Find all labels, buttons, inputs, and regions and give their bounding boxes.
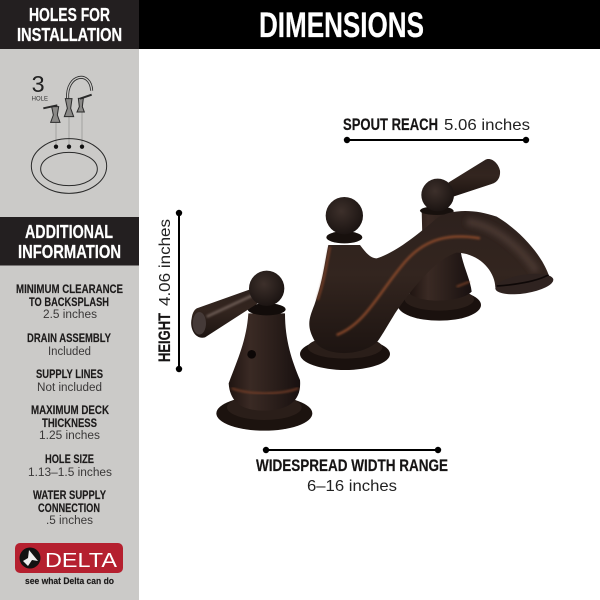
dimension: spout reach: 5.06 inches <box>444 117 530 134</box>
left sidebar panel <box>0 0 139 600</box>
spec: minimum clearance: 2.5 inches <box>43 309 97 321</box>
spec: maximum deck thickness: MAXIMUM DECK <box>31 403 109 417</box>
dimension: spout reach <box>343 115 530 143</box>
spec: water supply connection: CONNECTION <box>38 501 100 515</box>
heading: additional information: INFORMATION <box>18 241 121 262</box>
dimension: height: 4.06 inches <box>157 219 174 306</box>
dimension: height <box>155 210 182 372</box>
dimension: widespread width range: WIDESPREAD WIDTH RANGE <box>256 456 448 475</box>
spec: maximum deck thickness <box>31 403 109 442</box>
logo: Delta: see what Delta can do <box>25 576 114 586</box>
spec: supply lines: SUPPLY LINES <box>36 367 103 381</box>
dimension: widespread width range <box>256 447 448 495</box>
spec: minimum clearance <box>16 282 123 321</box>
spec: drain assembly: Included <box>48 346 91 358</box>
icon: three hole faucet and basin: 3 <box>32 71 45 97</box>
faucet: back handle <box>398 159 500 321</box>
spec: minimum clearance: TO BACKSPLASH <box>29 295 109 309</box>
dimension: widespread width range: 6–16 inches <box>307 478 397 495</box>
logo: Delta: DELTA <box>45 549 117 572</box>
spec: drain assembly: DRAIN ASSEMBLY <box>27 331 111 345</box>
dimension: height: HEIGHT <box>155 313 174 362</box>
dimension: spout reach: SPOUT REACH <box>343 115 438 134</box>
spec: water supply connection: WATER SUPPLY <box>33 488 106 502</box>
spec: hole size: HOLE SIZE <box>45 452 94 466</box>
spec: minimum clearance: MINIMUM CLEARANCE <box>16 282 123 296</box>
faucet: front handle <box>191 271 312 431</box>
spec: hole size: 1.13–1.5 inches <box>28 467 112 479</box>
spec: maximum deck thickness: THICKNESS <box>42 416 97 430</box>
top header bar <box>139 0 600 49</box>
icon: three hole faucet and basin: HOLE <box>32 97 48 103</box>
heading: additional information: ADDITIONAL <box>25 221 113 242</box>
heading: holes for installation: INSTALLATION <box>17 24 122 45</box>
spec: supply lines <box>36 367 103 394</box>
heading: holes for installation <box>0 0 139 49</box>
spec: water supply connection <box>33 488 106 527</box>
heading: additional information <box>0 217 139 266</box>
spec: maximum deck thickness: 1.25 inches <box>39 430 100 442</box>
spec: supply lines: Not included <box>37 382 102 394</box>
logo: Delta <box>15 543 123 586</box>
spec: water supply connection: .5 inches <box>46 515 93 527</box>
icon: three hole faucet and basin <box>31 71 107 193</box>
spec: drain assembly <box>27 331 111 358</box>
spec: hole size <box>28 452 112 479</box>
faucet: spout body <box>300 197 555 370</box>
heading: holes for installation: HOLES FOR <box>29 4 110 25</box>
title: DIMENSIONS <box>259 6 424 45</box>
